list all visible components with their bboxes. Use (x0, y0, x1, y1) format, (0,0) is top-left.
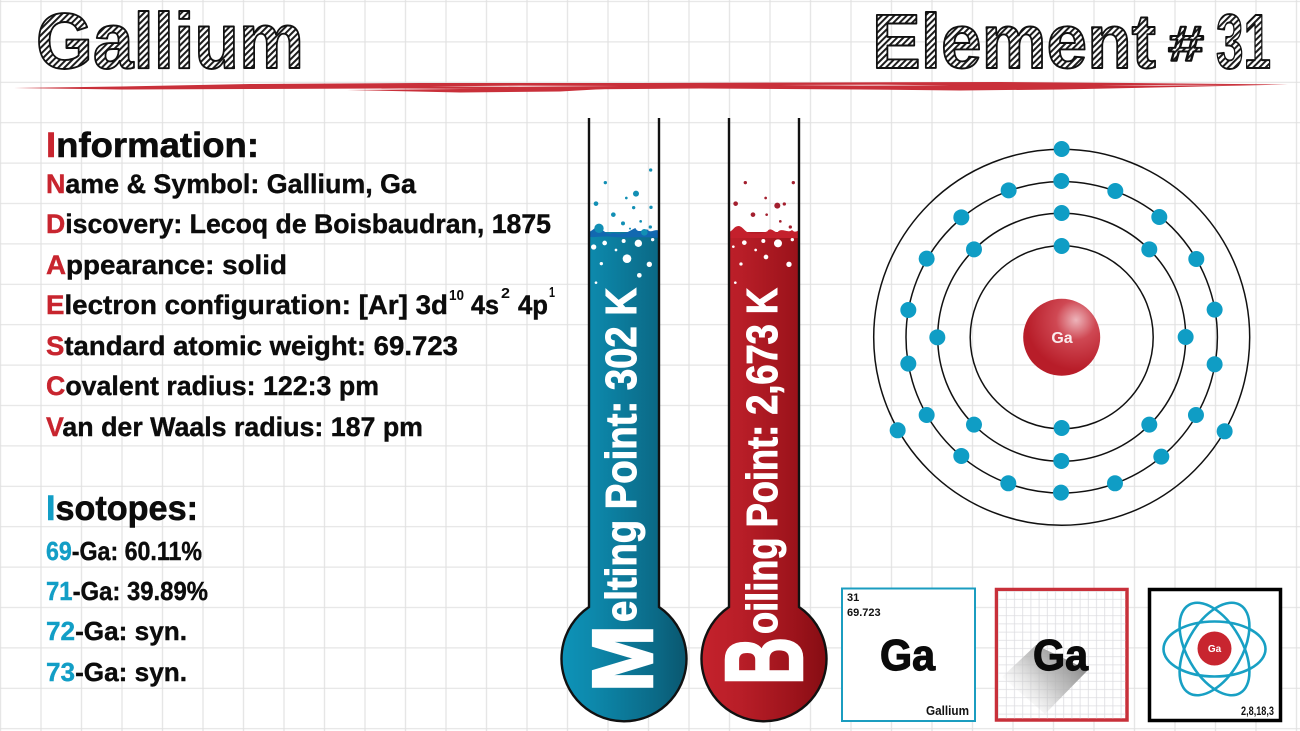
atomic number: 31 (847, 592, 859, 604)
foam and bubbles above red liquid (729, 181, 799, 284)
long shadow (1002, 645, 1088, 714)
electron configuration: 2 (501, 285, 510, 302)
panel: isotopes (46, 489, 208, 687)
element name: Gallium (926, 703, 969, 718)
title: Element # 31: Element (872, 0, 1156, 85)
isotope 69-Ga: 69-Ga: 60.11% (46, 536, 202, 566)
tube and bulb outline (562, 118, 687, 721)
label: Boiling Point (703, 288, 826, 685)
thermometer: melting point (562, 118, 687, 721)
electrons (890, 141, 1233, 501)
electron configuration (46, 284, 555, 320)
nucleus label: Ga (1051, 330, 1073, 347)
foam and bubbles above blue liquid (589, 168, 659, 284)
blue liquid (562, 232, 687, 721)
electron configuration: 1 (549, 284, 555, 301)
covalent radius: Covalent radius: 122:3 pm (46, 371, 379, 401)
name and symbol: Name & Symbol: Gallium, Ga (46, 169, 417, 199)
isotope 73-Ga: 73-Ga: syn. (46, 657, 187, 687)
nucleus label: Ga (1208, 644, 1222, 655)
electron configuration: 10 (449, 287, 464, 304)
label: Melting Point (576, 288, 671, 692)
isotope 72-Ga: 72-Ga: syn. (46, 616, 187, 646)
tube and bulb outline (702, 118, 827, 721)
symbol: Ga (880, 631, 935, 680)
card: long shadow symbol (996, 590, 1127, 720)
red brush stroke divider (14, 82, 1288, 92)
nucleus (1023, 299, 1100, 376)
van der waals radius: Van der Waals radius: 187 pm (46, 412, 423, 442)
red liquid (702, 232, 827, 721)
shell rings (874, 149, 1250, 525)
heading: Isotopes: Isotopes: (46, 489, 198, 528)
standard atomic weight: Standard atomic weight: 69.723 (46, 331, 458, 361)
electron configuration: 4p (518, 290, 548, 320)
card: periodic table tile (842, 588, 975, 721)
label: Melting Point: elting Point: 302 K (597, 288, 646, 622)
thermometer: boiling point (702, 118, 827, 721)
heading: Information: Information: (46, 126, 259, 165)
electron configuration: 2,8,18,3 (1241, 704, 1274, 718)
title: Element # 31: # (1168, 16, 1204, 72)
electron configuration: Electron configuration: [Ar] 3d (46, 290, 448, 320)
symbol: Ga (1033, 631, 1088, 680)
panel: information (46, 126, 555, 442)
atomic weight: 69.723 (847, 607, 881, 619)
appearance: Appearance: solid (46, 250, 287, 280)
atom diagram: electron shells (874, 141, 1250, 525)
label: Boiling Point: B (703, 637, 826, 685)
orbit ellipses (1164, 591, 1266, 707)
isotope 71-Ga: 71-Ga: 39.89% (46, 576, 208, 606)
discovery: Discovery: Lecoq de Boisbaudran, 1875 (46, 209, 551, 239)
label: Melting Point: M (576, 625, 671, 692)
label: Boiling Point: oiling Point: 2,673 K (738, 288, 787, 634)
atom nucleus (1198, 632, 1232, 666)
electron configuration: 4s (471, 290, 499, 320)
card: atom icon (1150, 590, 1280, 720)
